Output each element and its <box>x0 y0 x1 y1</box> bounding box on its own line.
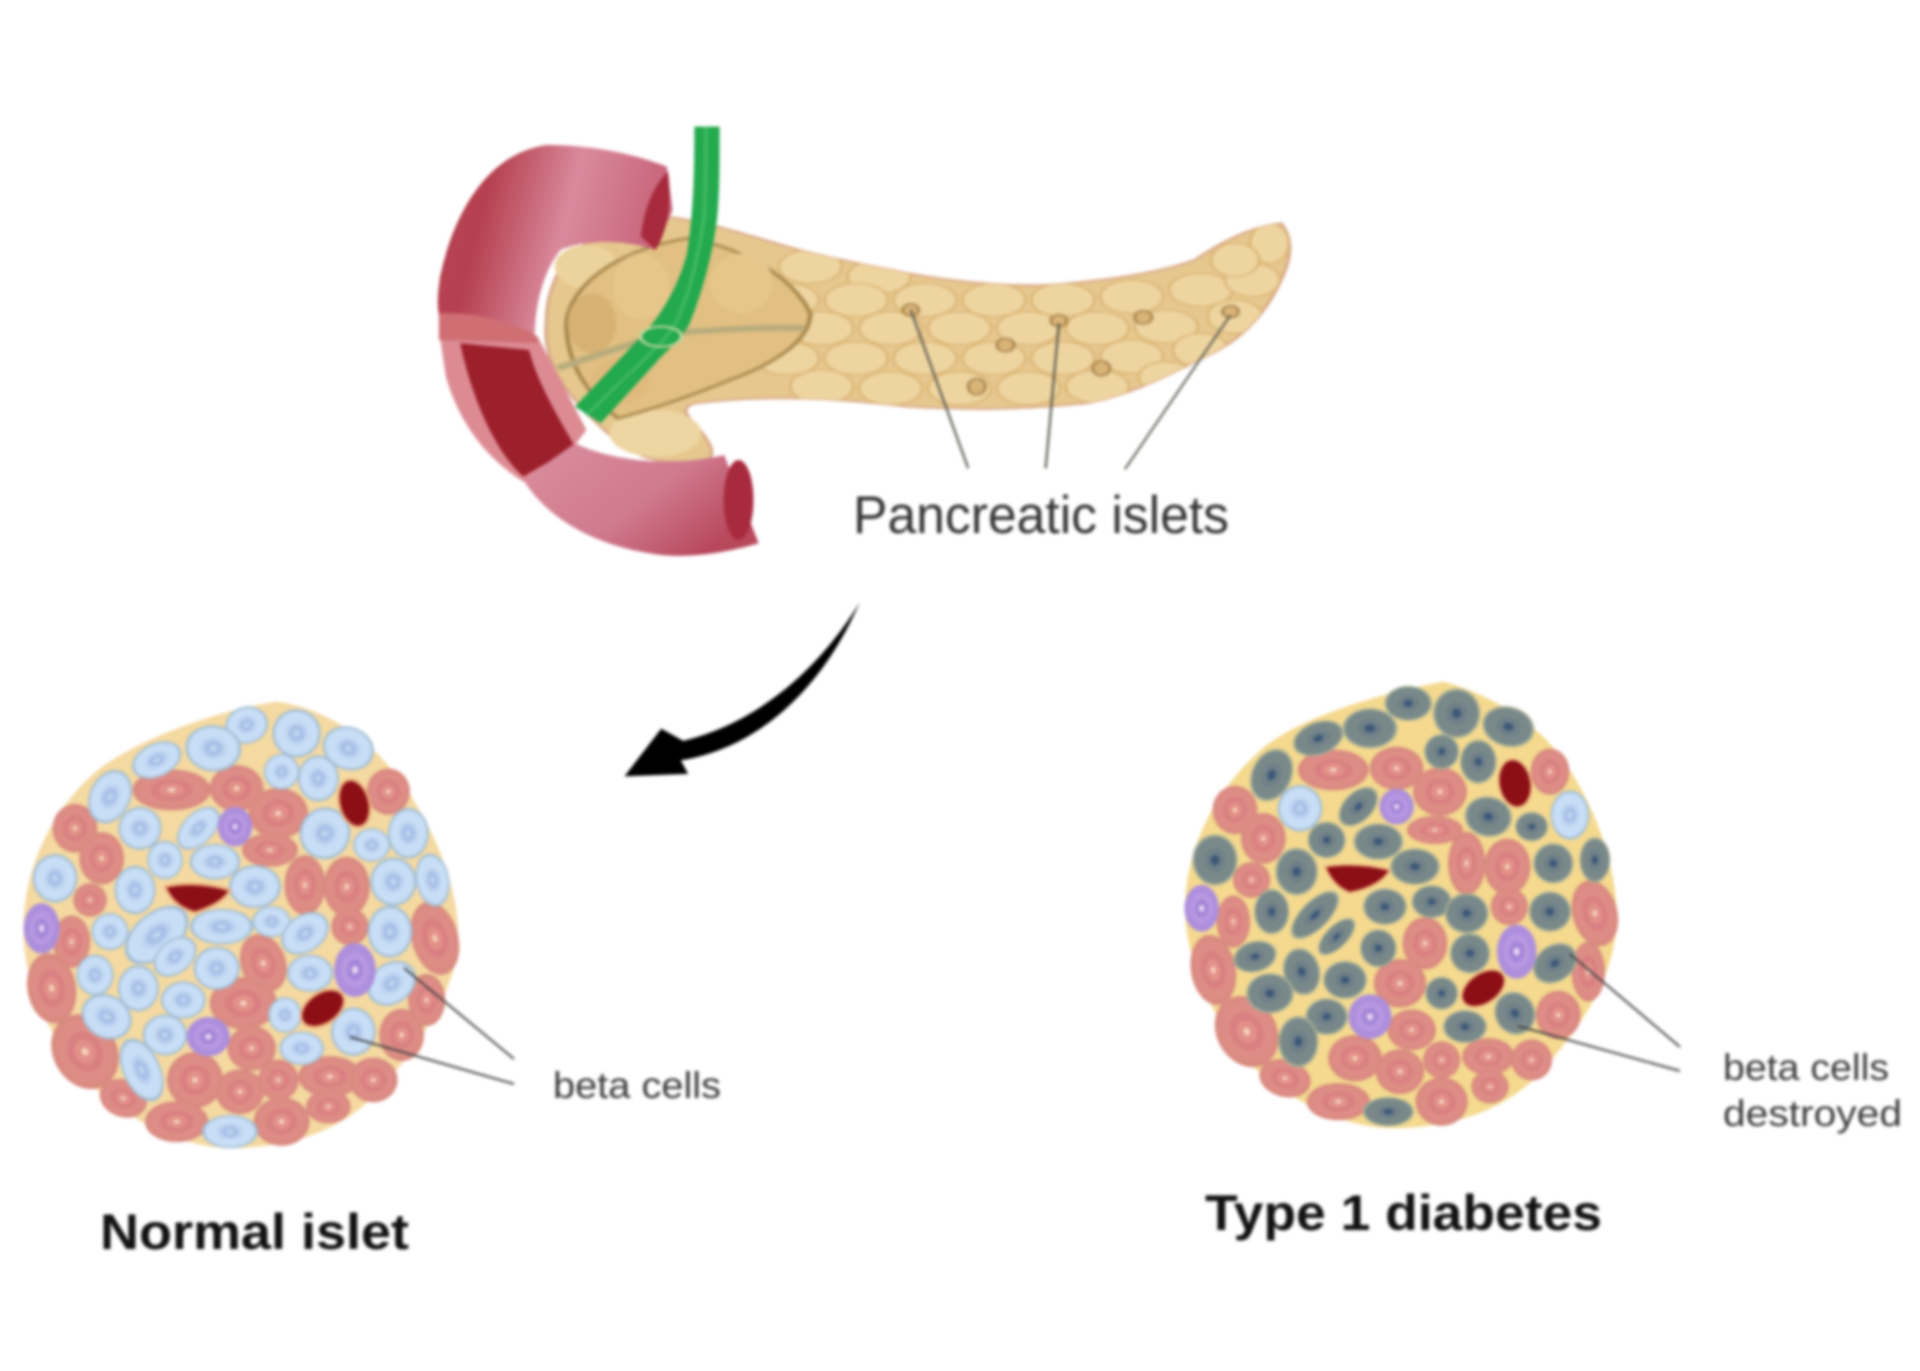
leader lines: beta cells <box>350 968 514 1084</box>
heading: normal islet: Normal islet <box>100 1204 409 1260</box>
islet outline <box>1185 682 1617 1128</box>
label: beta cells destroyed <box>1723 1047 1902 1134</box>
bile duct <box>575 127 720 423</box>
beta cells (blue) <box>33 701 454 1148</box>
duodenum lower opening <box>724 460 753 540</box>
alpha cells (red) <box>22 765 467 1146</box>
duodenum cut band <box>439 313 538 343</box>
pancreas cutaway head <box>566 238 810 418</box>
label: beta cells: beta cells <box>553 1065 721 1106</box>
leader lines: destroyed beta cells <box>1518 954 1680 1071</box>
islet markers <box>903 304 1239 395</box>
pancreatic duct <box>558 328 805 368</box>
pancreas head highlight <box>555 245 618 288</box>
duodenum inner lumen <box>460 343 575 477</box>
pancreas body <box>546 217 1290 462</box>
label: beta cells destroyed: destroyed <box>1723 1093 1902 1134</box>
normal islet <box>22 701 467 1148</box>
blood vessels <box>165 776 375 1035</box>
duodenum upper opening <box>641 172 670 250</box>
illustration: pancreas and duodenum <box>438 127 1290 556</box>
duodenum lower section <box>523 443 759 556</box>
label: pancreatic islets: Pancreatic islets <box>853 486 1229 545</box>
blood vessels <box>1325 757 1535 1014</box>
type 1 diabetes islet <box>1184 682 1625 1128</box>
heading: type 1 diabetes: Type 1 diabetes <box>1205 1185 1602 1241</box>
alpha cells (red) <box>1185 747 1625 1126</box>
pancreas uncinate lobe <box>609 410 701 457</box>
islet outline <box>23 702 458 1148</box>
delta cells (purple) <box>24 807 376 1056</box>
destroyed beta cells (gray) <box>1192 686 1610 1126</box>
delta cells (purple) <box>1184 789 1536 1039</box>
duodenum <box>438 145 759 556</box>
leader lines to pancreatic islets <box>911 310 1230 469</box>
surviving beta cells (blue) <box>1278 785 1589 840</box>
duodenum upper section <box>438 145 673 335</box>
duodenum cutaway outer wall <box>439 330 586 482</box>
arrow <box>624 602 860 776</box>
label: beta cells destroyed: beta cells <box>1723 1047 1889 1088</box>
